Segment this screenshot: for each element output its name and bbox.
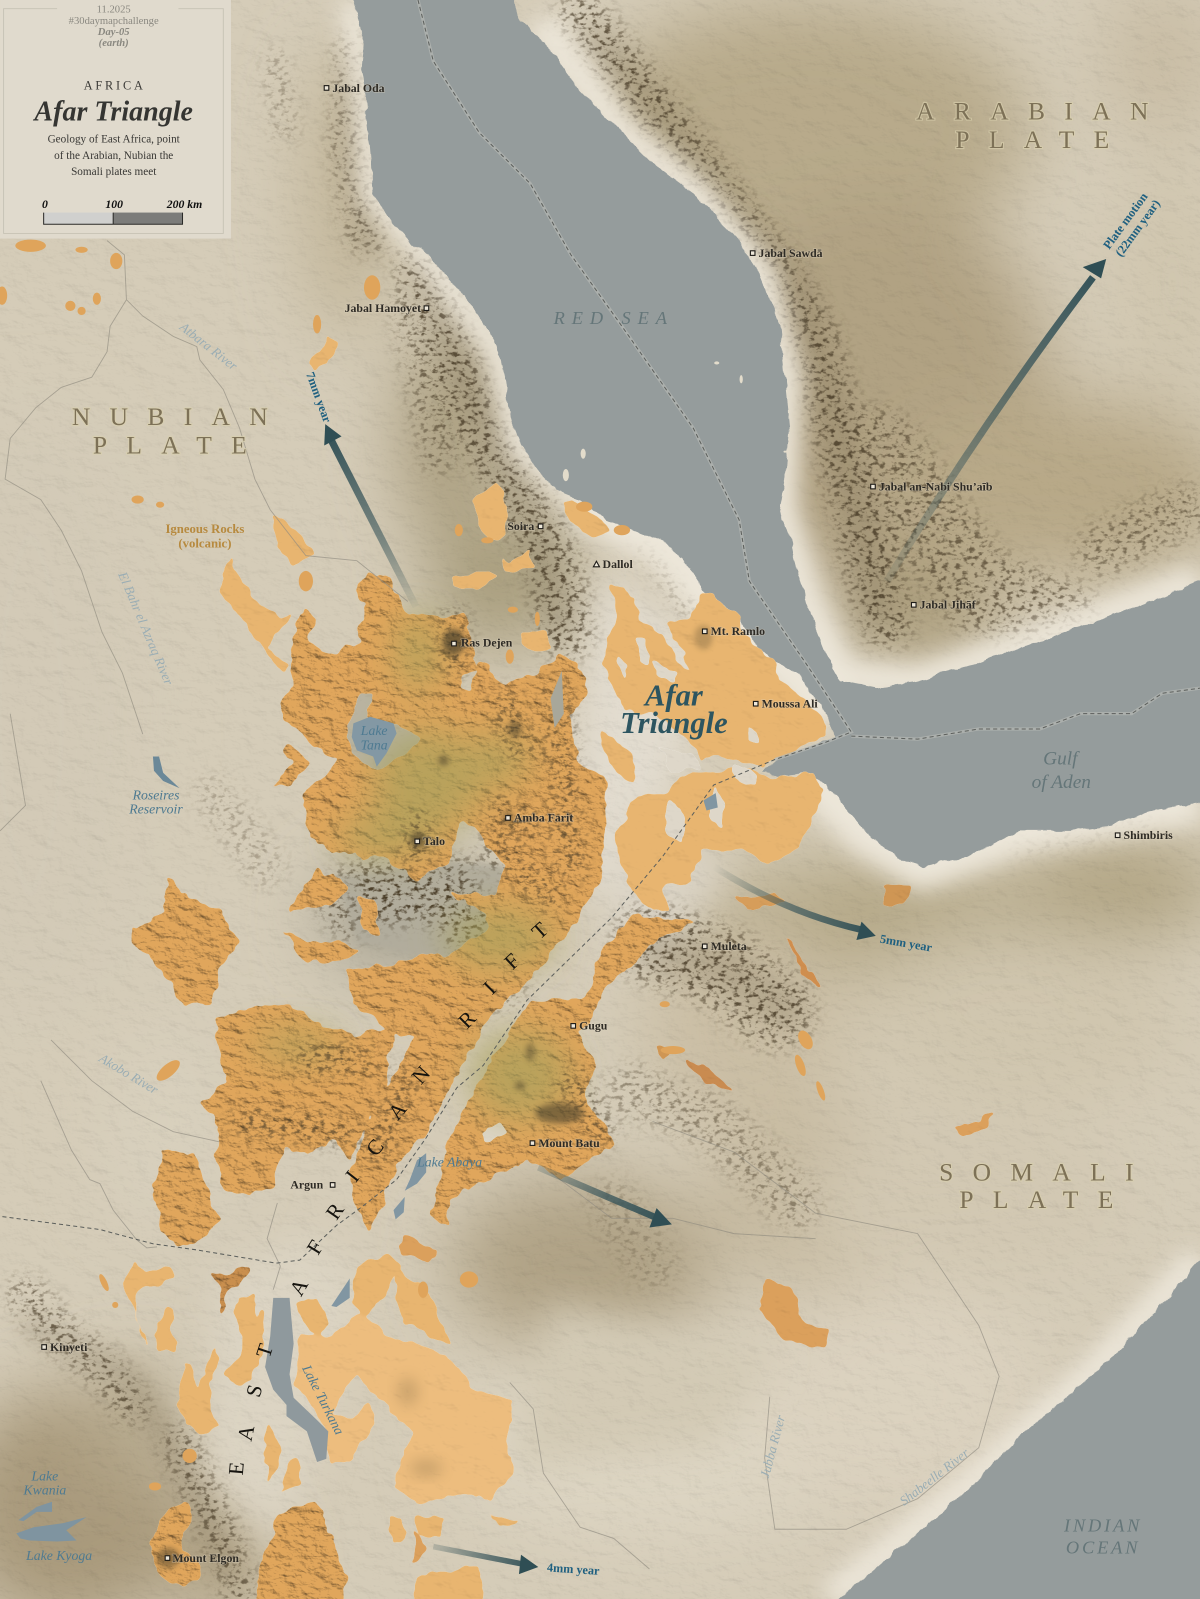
geology label: igneous rocks: (volcanic) xyxy=(178,536,231,550)
arrow: Somali plate motion at Mount Batu xyxy=(538,1167,672,1227)
peak markers and names: Argun xyxy=(290,1178,324,1192)
lake labels: Reservoir xyxy=(128,802,183,817)
peak markers and names: Talo xyxy=(423,834,445,848)
light gaps within the Afar volcanics xyxy=(347,637,760,1144)
peak markers and names: Mount Batu xyxy=(538,1136,600,1150)
peak markers and names: Dallol xyxy=(603,557,633,571)
sea labels: of Aden xyxy=(1032,772,1091,793)
curved label: East African Rift: R xyxy=(321,1198,349,1224)
river labels: Shabeelle River xyxy=(897,1445,972,1508)
curved label: East African Rift: N xyxy=(407,1061,435,1089)
plate name: Somali: SOMALI xyxy=(939,1158,1153,1187)
river labels: El Bahr el Azraq River xyxy=(115,569,177,688)
panel: subtitle: Somali plates meet xyxy=(71,166,157,178)
curved label: East African Rift: T xyxy=(527,917,553,944)
panel: credits xyxy=(69,5,159,49)
curved label: East African Rift xyxy=(224,917,553,1476)
panel: scale bar: 200 km xyxy=(166,198,202,211)
region label: Afar Triangle: Afar xyxy=(643,679,704,713)
igneous rocks: smooth plateaus xyxy=(123,334,994,1599)
peak markers and names: Kinyeti xyxy=(50,1340,88,1354)
Red Sea islands xyxy=(563,361,787,481)
river labels: Atbara River xyxy=(176,318,241,374)
geology label: igneous rocks xyxy=(165,522,244,550)
sea labels: INDIAN xyxy=(1063,1515,1142,1535)
region label: Afar Triangle: Triangle xyxy=(620,706,728,740)
igneous rocks: rugged highlands xyxy=(133,573,696,1599)
curved label: East African Rift: F xyxy=(500,948,525,974)
lake labels: Kwania xyxy=(22,1483,66,1498)
panel: title: Afar Triangle xyxy=(32,96,193,127)
panel: subtitle: Geology of East Africa, point xyxy=(48,134,181,146)
peak markers and names: Jabal Jihāf xyxy=(920,598,977,612)
peak markers and names: Ras Dejen xyxy=(461,635,513,649)
panel: credits: Day-05 xyxy=(97,27,130,38)
peak markers and names: Jabal Sawdā xyxy=(759,246,823,260)
arrow: 5mm Somali plate motion xyxy=(714,867,876,940)
motion labels xyxy=(303,190,1163,1578)
plate name: Arabian: PLATE xyxy=(955,125,1129,154)
geology label: igneous rocks: Igneous Rocks xyxy=(165,522,244,536)
panel: region label: AFRICA xyxy=(84,79,146,93)
soft escarpment shading xyxy=(31,41,877,1570)
curved label: East African Rift: R xyxy=(454,1006,481,1033)
curved label: East African Rift: A xyxy=(383,1097,412,1124)
river labels xyxy=(96,318,972,1508)
coast glow xyxy=(352,0,1200,1599)
lake labels: Lake Abaya xyxy=(416,1154,482,1169)
peak markers and names: Jabal Oda xyxy=(332,81,385,95)
lakes xyxy=(16,671,718,1541)
plate name: Arabian xyxy=(916,96,1168,154)
lake labels xyxy=(22,723,482,1563)
gorge: Blue Nile canyon xyxy=(336,861,505,958)
plate name: Arabian: ARABIAN xyxy=(916,96,1168,125)
highland olive and dark peaks xyxy=(157,612,713,1568)
panel: subtitle: of the Arabian, Nubian the xyxy=(54,150,173,162)
sea: Indian Ocean xyxy=(826,1252,1200,1599)
peak markers and names: Mt. Ramlo xyxy=(711,624,765,638)
motion labels: Plate motion xyxy=(1100,190,1151,252)
peak markers and names: Shimbiris xyxy=(1124,828,1173,842)
motion labels: 5mm year xyxy=(879,932,934,955)
lake labels: Tana xyxy=(361,737,388,752)
panel: credits: #30daymapchallenge xyxy=(69,16,159,27)
plate name: Somali: PLATE xyxy=(959,1185,1133,1214)
panel: scale bar: 0 xyxy=(42,198,48,211)
rivers xyxy=(0,241,999,1569)
lake labels: Lake xyxy=(31,1468,58,1483)
sea labels: OCEAN xyxy=(1066,1538,1140,1558)
igneous rocks: small outcrops xyxy=(0,240,827,1491)
river labels: Akobo River xyxy=(96,1050,162,1098)
gorge relief xyxy=(352,892,479,938)
peak markers and names: Moussa Ali xyxy=(762,697,818,711)
plate boundaries xyxy=(0,0,1200,1263)
panel: subtitle xyxy=(48,134,181,178)
arrow: 22mm Arabian plate motion xyxy=(887,259,1106,581)
peak markers and names: Mount Elgon xyxy=(172,1551,239,1565)
plate name: Nubian: NUBIAN xyxy=(72,402,287,431)
curved label: East African Rift: T xyxy=(251,1341,278,1361)
arrow: 4mm motion xyxy=(433,1547,538,1574)
lake labels: Lake Kyoga xyxy=(25,1548,92,1563)
plate name: Somali xyxy=(939,1158,1153,1214)
lake labels: Lake Turkana xyxy=(299,1362,347,1437)
lake labels: Lake xyxy=(360,723,388,738)
curved label: East African Rift: I xyxy=(479,977,501,999)
panel: credits: 11.2025 xyxy=(97,5,131,16)
curved label: East African Rift: A xyxy=(233,1422,259,1443)
curved label: East African Rift: S xyxy=(241,1382,267,1400)
motion labels: (22mm year) xyxy=(1112,197,1163,259)
plate name: Nubian: PLATE xyxy=(93,431,266,460)
motion labels: 4mm year xyxy=(547,1560,601,1578)
plate name: Nubian xyxy=(72,402,287,460)
peak markers and names: Gugu xyxy=(579,1019,608,1033)
curved label: East African Rift: A xyxy=(285,1274,313,1300)
curved label: East African Rift: C xyxy=(361,1134,389,1161)
river labels: Jubba River xyxy=(757,1413,788,1480)
seas: Red Sea, Gulf of Aden xyxy=(352,0,1200,867)
curved label: East African Rift: I xyxy=(341,1166,364,1186)
title panel xyxy=(0,0,231,239)
sea labels: RED SEA xyxy=(553,308,674,328)
panel: scale bar xyxy=(42,198,202,224)
sea labels xyxy=(553,308,1142,1558)
panel: scale bar: 100 xyxy=(105,198,123,211)
peak markers and names: Jabal Hamoyet xyxy=(345,301,421,315)
motion labels: 7mm year xyxy=(303,370,335,425)
panel: credits: (earth) xyxy=(99,38,129,49)
sea labels: Gulf xyxy=(1043,749,1080,770)
arrow: 7mm Nubian plate motion xyxy=(324,424,416,607)
peak markers and names: Soira xyxy=(507,519,534,533)
region label: Afar Triangle xyxy=(620,679,728,740)
peak markers and names: Muleta xyxy=(711,939,747,953)
curved label: East African Rift: F xyxy=(302,1236,329,1259)
peak markers and names: Amba Farit xyxy=(514,811,573,825)
lake labels: Roseires xyxy=(132,787,179,802)
peak markers and names: Jabal an-Nabi Shu’aīb xyxy=(879,479,993,493)
curved label: East African Rift: E xyxy=(224,1461,249,1476)
